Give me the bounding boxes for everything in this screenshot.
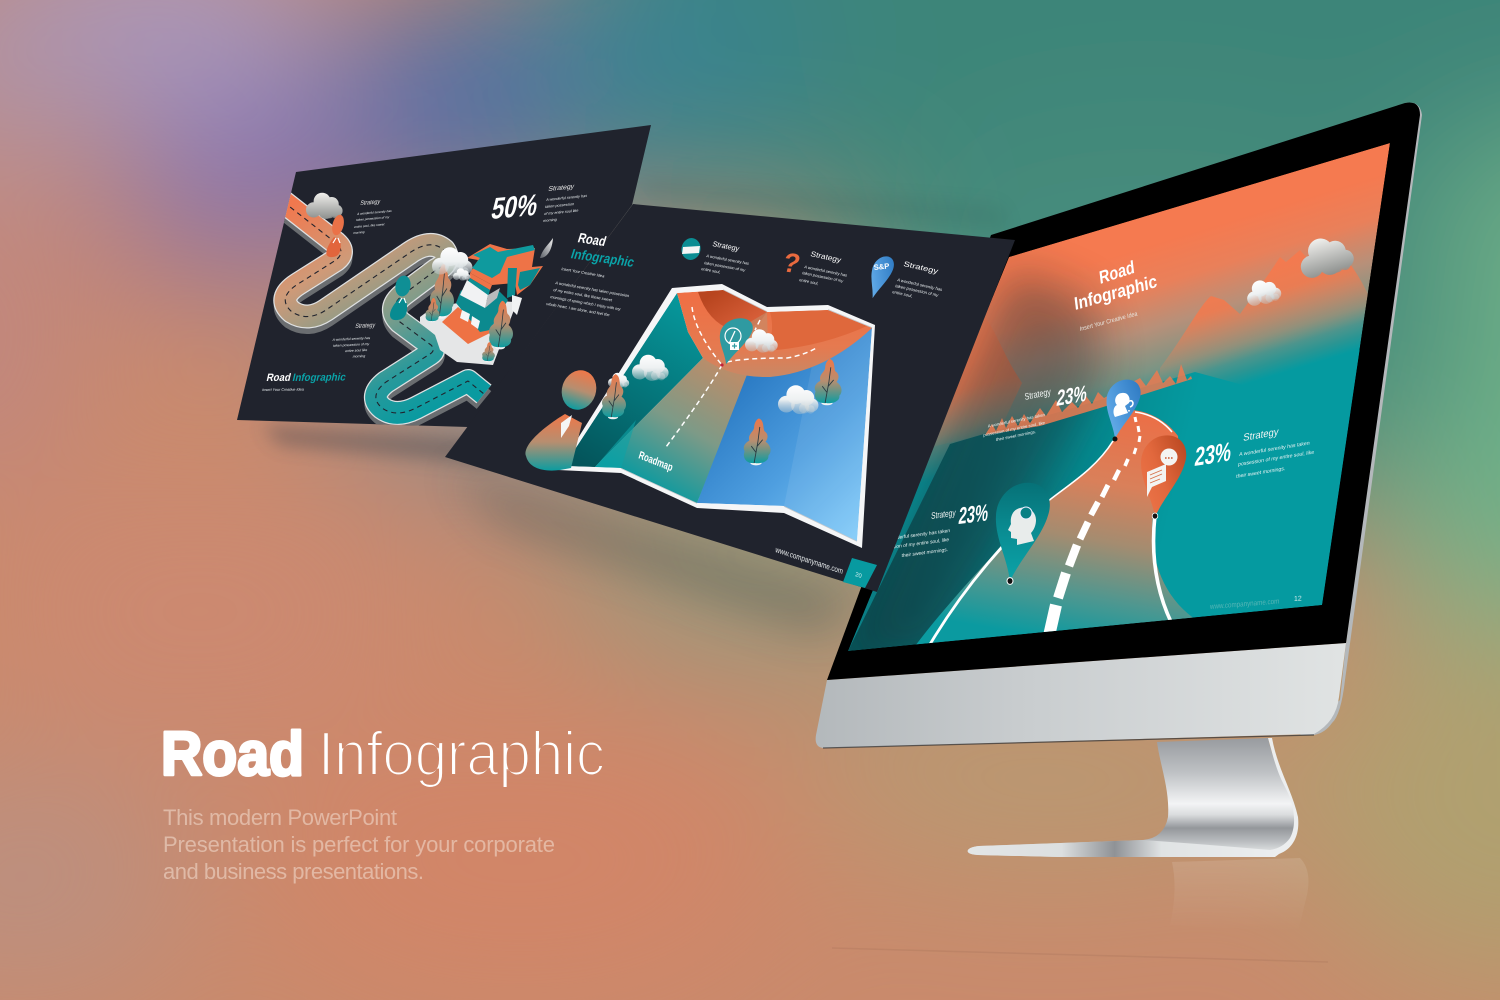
folded map (558, 284, 875, 548)
mountains (920, 250, 1368, 450)
main heading: Road (161, 720, 304, 789)
slide 1 strategy block top (353, 198, 392, 235)
strategy block upper left: 23% (1055, 380, 1088, 411)
slide 1 percent block: Strategy (548, 183, 575, 193)
strategy block lower left: A wonderful serenity has taken (883, 528, 950, 543)
strategy block lower left: Strategy (931, 507, 956, 521)
building right wall (518, 268, 540, 290)
imac stand reflection (832, 858, 1328, 962)
sub heading: Presentation is perfect for your corporate (163, 832, 555, 857)
strategy block upper left: Strategy (1024, 387, 1052, 403)
main heading: Infographic (318, 720, 605, 789)
slide 1 percent block: morning (543, 218, 557, 223)
strategy two (779, 247, 848, 286)
strategy block upper left: their sweet mornings. (996, 429, 1036, 442)
building trees and clouds (426, 247, 513, 362)
slide 1 percent block (489, 183, 588, 226)
imac chin (816, 643, 1346, 748)
imac black bezel (827, 102, 1420, 680)
strategy two: A wonderful serenity has (804, 264, 848, 278)
strategy two: entire soul, (799, 277, 819, 286)
building teal roof (472, 245, 535, 278)
slide 1 strategy block lower: entire soul like (345, 348, 368, 353)
small cloud on mountain (1247, 280, 1282, 306)
strategy two: Strategy (809, 249, 843, 264)
map centre wedge (595, 358, 748, 503)
strategy one (679, 236, 750, 274)
strategy block upper left: possession of my entire soul, like (983, 420, 1046, 438)
map orange ring (677, 290, 872, 377)
screen title: Road (1098, 257, 1136, 288)
sub heading: and business presentations. (163, 859, 424, 884)
strategy one: A wonderful serenity has (706, 253, 750, 266)
map blue panel (697, 328, 872, 541)
strategy block lower left: possession of my entire soul, like (877, 537, 949, 553)
screen shadow from slide (840, 268, 1104, 660)
building ground (420, 302, 517, 365)
map left panel (564, 293, 703, 467)
sub heading: This modern PowerPoint (163, 805, 397, 830)
building orange base (442, 307, 492, 344)
slide 1 title: Road (265, 372, 292, 384)
dashed route (666, 307, 818, 447)
strategy block right: A wonderful serenity has taken (1239, 440, 1310, 458)
strategy block right: possession of my entire soul, like (1238, 450, 1314, 468)
screen footer: 12 (1294, 595, 1302, 603)
strategy three: S&P (873, 261, 890, 272)
screen title: Infographic (1073, 271, 1158, 314)
strategy block right (1193, 427, 1314, 480)
slide 1 title (262, 372, 347, 392)
slide 1 strategy block lower: taken possession of my (333, 342, 370, 348)
slide 1 panel (237, 125, 651, 427)
strategy block right: 23% (1193, 437, 1233, 472)
strategy block upper left: A wonderful serenity has taken (988, 412, 1046, 429)
isometric building (420, 238, 553, 365)
sub heading (163, 805, 555, 884)
slide 1: road isometric (237, 125, 651, 427)
slide 1 title: Infographic (291, 372, 347, 384)
pin blue with person icon (1106, 380, 1141, 442)
isometric winding road (276, 196, 484, 419)
chimney smoke (540, 238, 553, 258)
building pillar (507, 268, 517, 298)
slide 1 strategy block top: taken possession of my (356, 215, 390, 222)
strategy three: A wonderful serenity has (897, 277, 943, 292)
slide 2 title: Insert Your Creative Idea (561, 266, 606, 279)
slide 2 title: of my entire soul, like these sweet (553, 287, 614, 303)
strategy block lower left (894, 504, 988, 557)
slide 1 strategy block top: A wonderful serenity has (357, 209, 392, 216)
slide 1 strategy block top: Strategy (360, 198, 381, 207)
strategy block lower left: 23% (957, 499, 990, 530)
strategy two: taken possession of my (802, 270, 844, 283)
icon: teal pill (679, 236, 703, 262)
strategy one: taken possession of my (704, 260, 746, 272)
slide 2 title: Infographic (569, 246, 637, 270)
slide shadows on background (262, 180, 1010, 635)
screen sky gradient (848, 143, 1390, 651)
strategy one: Strategy (711, 239, 741, 253)
slide 1 strategy block lower: morning (352, 354, 366, 359)
slide 1 grey cloud (306, 193, 343, 219)
slide 2 title (546, 230, 637, 317)
slide 1 percent block: A wonderful serenity has (546, 194, 588, 202)
strategy three: entire soul, (892, 289, 913, 298)
slide 1 strategy block lower (332, 322, 376, 359)
slide 2 title: A wonderful serenity has taken possession (555, 280, 630, 298)
strategy block right: Strategy (1243, 427, 1280, 444)
slide 1 strategy block top: entire soul, like sweet (354, 222, 385, 229)
imac body (816, 102, 1422, 748)
lower ground (848, 350, 1360, 651)
person figure (526, 366, 601, 471)
slide 2 panel (445, 204, 1015, 592)
map clouds (608, 329, 818, 414)
slide 1 strategy block lower: A wonderful serenity has (332, 336, 371, 342)
slide 2 footer: www.companyname.com (774, 545, 844, 576)
imac screen slide (840, 143, 1400, 660)
pin orange with chat icon (1141, 436, 1186, 519)
roadmap label: Roadmap (637, 449, 674, 474)
screen title: Insert Your Creative Idea (1079, 310, 1138, 333)
building white block (460, 280, 488, 308)
slide 1 strategy block lower: Strategy (355, 322, 376, 330)
slide 1 teal marker (390, 274, 413, 320)
slide 2: roadmap (445, 204, 1015, 592)
building upper orange (467, 244, 543, 295)
map paper outline (558, 284, 875, 548)
slide 2 title: whole heart. I am alone, and feel the (546, 301, 611, 317)
screen footer: www.companyname.com (1209, 596, 1279, 611)
strategy three (862, 255, 943, 299)
slide 2 title: mornings of spring which I enjoy with my (550, 294, 621, 311)
imac stand (968, 738, 1298, 857)
map trees (602, 359, 842, 465)
strategy one: entire soul, (701, 266, 721, 274)
strategy block upper left (984, 386, 1086, 441)
building windows (460, 310, 470, 322)
screen title (1073, 257, 1158, 333)
slide 1 title: Insert Your Creative Idea (262, 388, 305, 392)
slide 1 strategy block top: morning (353, 230, 365, 235)
icon: question mark: ? (779, 247, 804, 279)
icon: blue pin (862, 255, 897, 299)
cloud on mountain (1300, 238, 1354, 278)
strategy block lower left: their sweet mornings. (901, 547, 948, 559)
strategy three: Strategy (902, 259, 940, 276)
slide 1 orange marker (326, 213, 346, 257)
building front lower wall (456, 290, 508, 332)
tree line (985, 364, 1192, 435)
slide 1 percent block: of my entire soul like (544, 209, 579, 216)
building orange strip (470, 273, 492, 290)
slide 1 percent block: 50% (489, 187, 541, 226)
main heading (161, 720, 605, 789)
slide 1 percent block: taken possession (545, 202, 575, 209)
imac silver edge (1300, 102, 1422, 735)
map pin (710, 318, 756, 367)
strategy three: taken possession of my (895, 283, 940, 298)
slide 2 footer: 20 (855, 572, 863, 580)
slide 2 title: Road (576, 230, 608, 249)
strategy block right: their sweet mornings. (1236, 466, 1286, 480)
road (915, 410, 1198, 646)
pin teal with head icon (996, 483, 1050, 585)
